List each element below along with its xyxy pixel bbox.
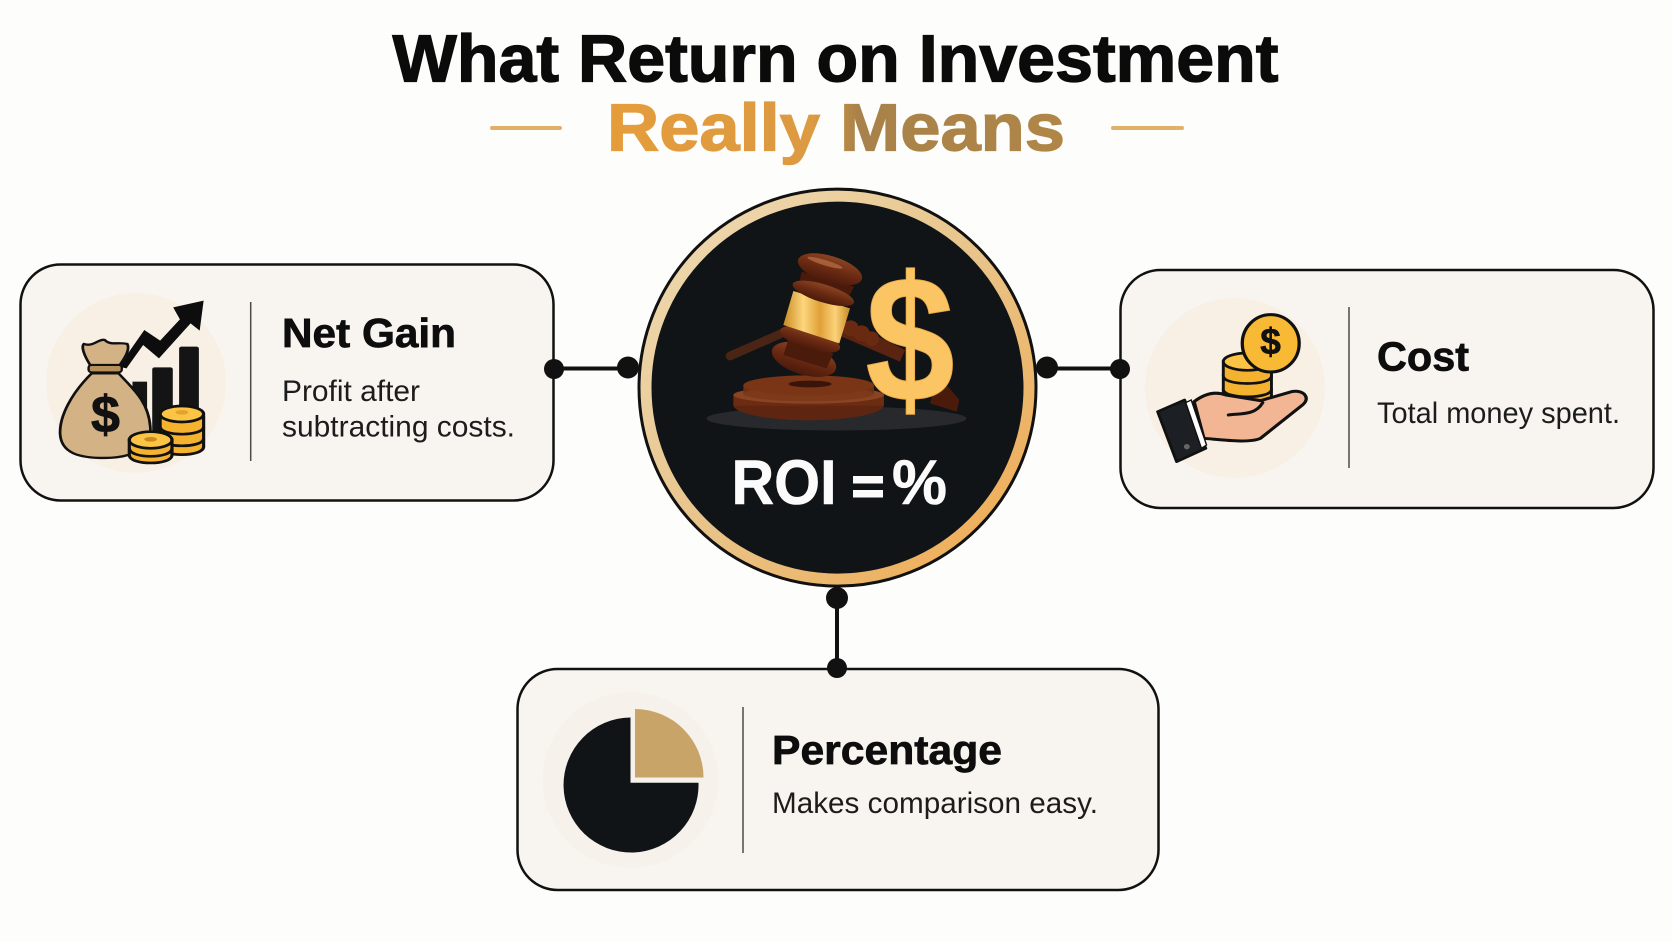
body text: percentage: Makes comparison easy. — [772, 787, 1098, 820]
connector: net gain to centre — [544, 356, 639, 379]
icon: gavel and dollar sign: $ — [865, 240, 955, 440]
icon: gavel and dollar sign — [706, 240, 966, 440]
body text: net gain — [282, 375, 515, 444]
ROI formula: ROI — [732, 448, 836, 518]
panel: centre ROI badge — [639, 189, 1036, 586]
panel: percentage — [518, 669, 1158, 890]
icon: money bag, rising chart and coins: $ — [91, 386, 120, 444]
connector: centre to percentage — [826, 587, 848, 678]
icon: hand holding coins — [1145, 298, 1325, 478]
divider — [742, 707, 744, 853]
icon: hand holding coins: $ — [1260, 321, 1281, 362]
title line 1: What Return on Investment — [392, 22, 1278, 96]
title right rule — [1111, 126, 1184, 130]
heading: net gain: Net Gain — [282, 310, 456, 356]
body text: cost: Total money spent. — [1377, 397, 1620, 430]
title left rule — [490, 126, 562, 130]
heading: percentage: Percentage — [772, 727, 1002, 773]
icon: money bag, rising chart and coins — [46, 293, 226, 473]
heading: cost: Cost — [1377, 334, 1469, 380]
ROI formula: % — [892, 448, 947, 518]
icon: pie chart — [542, 692, 718, 868]
body text: net gain: Profit after — [282, 375, 420, 408]
connector: centre to cost — [1036, 356, 1130, 379]
title line 2: Really Means — [607, 90, 1065, 166]
title — [392, 22, 1278, 166]
panel: cost — [1120, 270, 1654, 508]
divider — [1348, 307, 1350, 468]
ROI formula — [732, 448, 947, 518]
panel: net gain — [20, 264, 554, 500]
divider — [250, 302, 252, 461]
body text: net gain: subtracting costs. — [282, 410, 515, 444]
